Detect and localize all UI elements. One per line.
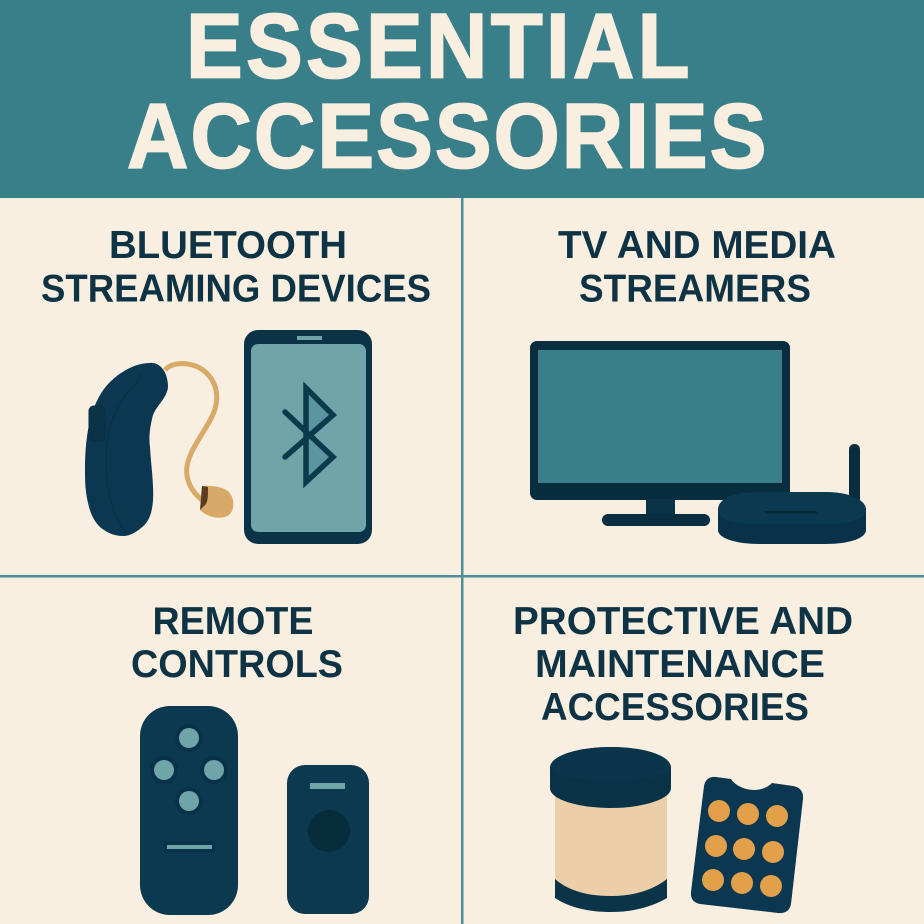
icon: battery blister pack: [691, 777, 803, 913]
heading: protective: ACCESSORIES: [541, 686, 809, 729]
heading: protective: PROTECTIVE AND: [513, 600, 853, 643]
heading: tv: TV AND MEDIA: [558, 224, 836, 267]
icon: media streamer box: [718, 444, 866, 544]
icon: small remote: [287, 765, 369, 914]
heading: remote: REMOTE: [152, 600, 314, 643]
heading: tv: STREAMERS: [579, 268, 811, 310]
heading: remote: [131, 600, 343, 686]
heading: bluetooth: BLUETOOTH: [109, 224, 347, 267]
heading: protective: [513, 600, 853, 729]
panel: tv and media streamers: [530, 224, 866, 544]
icon: hearing aid: [85, 363, 233, 536]
heading: remote: CONTROLS: [131, 643, 343, 686]
title banner: [0, 0, 924, 198]
heading: tv: [558, 224, 836, 310]
panel: bluetooth streaming devices: [41, 224, 431, 544]
heading: bluetooth: STREAMING DEVICES: [41, 268, 431, 310]
icon: phone with bluetooth: [244, 330, 372, 544]
heading: bluetooth: [41, 224, 431, 310]
icon: jar: [550, 747, 671, 912]
panel: protective and maintenance accessories: [513, 600, 853, 913]
panel: remote controls: [131, 600, 369, 915]
icon: television: [530, 341, 790, 526]
heading: protective: MAINTENANCE: [535, 643, 825, 686]
title banner: ACCESSORIES: [127, 84, 766, 187]
icon: large remote: [140, 706, 238, 915]
